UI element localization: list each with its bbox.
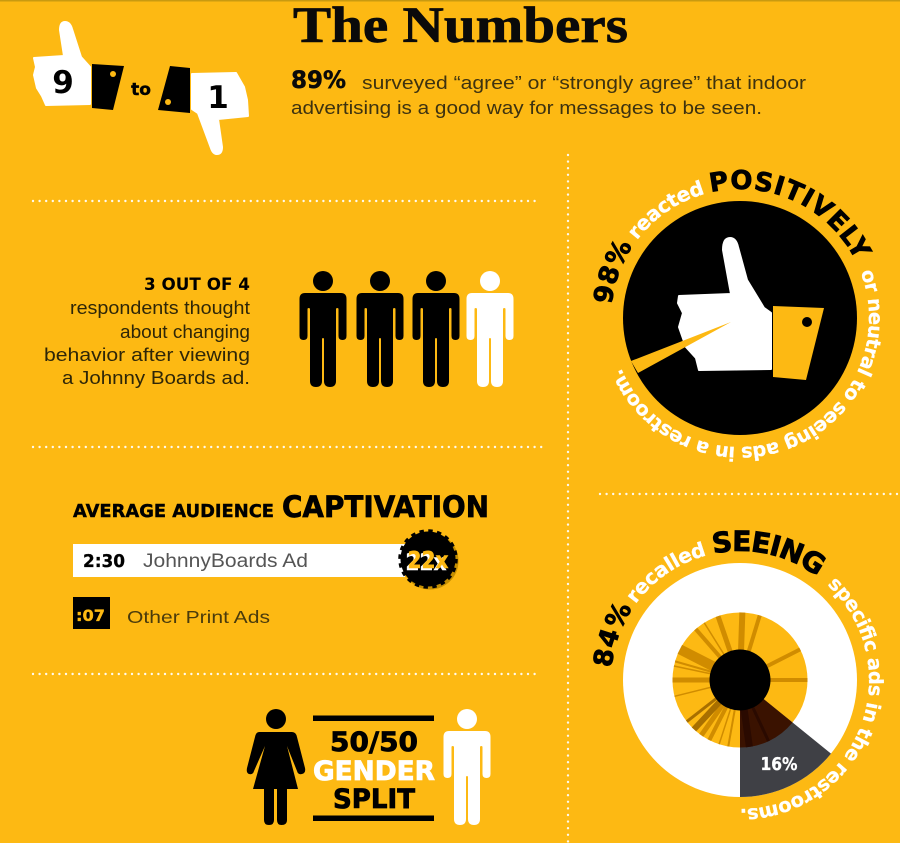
- panel: 84% recalled seeing: [593, 530, 884, 820]
- curved text: seeing: 84%: [593, 603, 631, 666]
- bar: JohnnyBoards ad: 2:30: [83, 551, 125, 572]
- icon: 9 to 1 thumbs: 1: [207, 80, 229, 116]
- donut chart: 16%: [760, 754, 798, 775]
- icon: woman: [247, 709, 305, 825]
- heading: average audience captivation: AVERAGE AUDIENCE: [73, 502, 274, 522]
- bar: other print ads: :07: [76, 606, 105, 625]
- heading: average audience captivation: CAPTIVATION: [282, 490, 489, 524]
- text block: 89% agree: surveyed “agree” or “strongly agree” that indoor: [362, 72, 806, 93]
- curved text: seeing: [593, 530, 884, 820]
- text block: 3 out of 4: behavior after viewing: [44, 345, 250, 365]
- bar: other print ads: [73, 597, 270, 629]
- text block: 3 out of 4: [44, 275, 250, 388]
- curved text: positively: or neutral to seeing ads in a restroom.: [616, 270, 881, 462]
- curved text: positively: 98%: [593, 240, 632, 302]
- text block: 89% agree: 89%: [291, 66, 346, 94]
- curved text: positively: [593, 169, 881, 462]
- heading: average audience captivation: [73, 490, 489, 524]
- curved text: seeing: SEEING: [712, 530, 826, 574]
- icon: 9 to 1 thumbs: to: [131, 80, 151, 100]
- text block: 50/50 gender split: SPLIT: [333, 784, 416, 815]
- text block: 50/50 gender split: 50/50: [330, 727, 418, 758]
- icon: black circle with thumbs up: [623, 201, 857, 435]
- text block: 89% agree: advertising is a good way for messages to be seen.: [291, 97, 762, 118]
- icon: man: [444, 709, 490, 825]
- badge: 22x: 22x: [406, 550, 447, 576]
- icon: people 3 of 4: [300, 271, 514, 387]
- text block: 3 out of 4: a Johnny Boards ad.: [62, 368, 250, 388]
- curved text: positively: reacted: [629, 180, 704, 240]
- text block: 50/50 gender split: GENDER: [313, 756, 435, 787]
- text block: 3 out of 4: respondents thought: [70, 298, 250, 318]
- bar: other print ads: Other Print Ads: [127, 607, 270, 627]
- curved text: seeing: specific ads in the restrooms.: [742, 578, 884, 820]
- text block: 3 out of 4: 3 OUT OF 4: [144, 275, 250, 295]
- panel: 98% reacted positively: [593, 169, 881, 462]
- text block: 3 out of 4: about changing: [120, 322, 250, 342]
- bar: JohnnyBoards ad: JohnnyBoards Ad: [143, 551, 308, 572]
- bar: JohnnyBoards ad: [73, 544, 405, 577]
- badge: 22x: 22x: [408, 548, 449, 574]
- icon: 9 to 1 thumbs: 9: [52, 65, 74, 101]
- curved text: positively: POSITIVELY: [710, 169, 874, 256]
- text block: 89% agree: [291, 66, 806, 118]
- badge: 22x: [400, 531, 458, 590]
- icon: 9 to 1 thumbs: [34, 22, 248, 154]
- curved text: seeing: recalled: [628, 541, 706, 603]
- text block: 50/50 gender split: [313, 716, 435, 821]
- donut chart: [623, 563, 857, 797]
